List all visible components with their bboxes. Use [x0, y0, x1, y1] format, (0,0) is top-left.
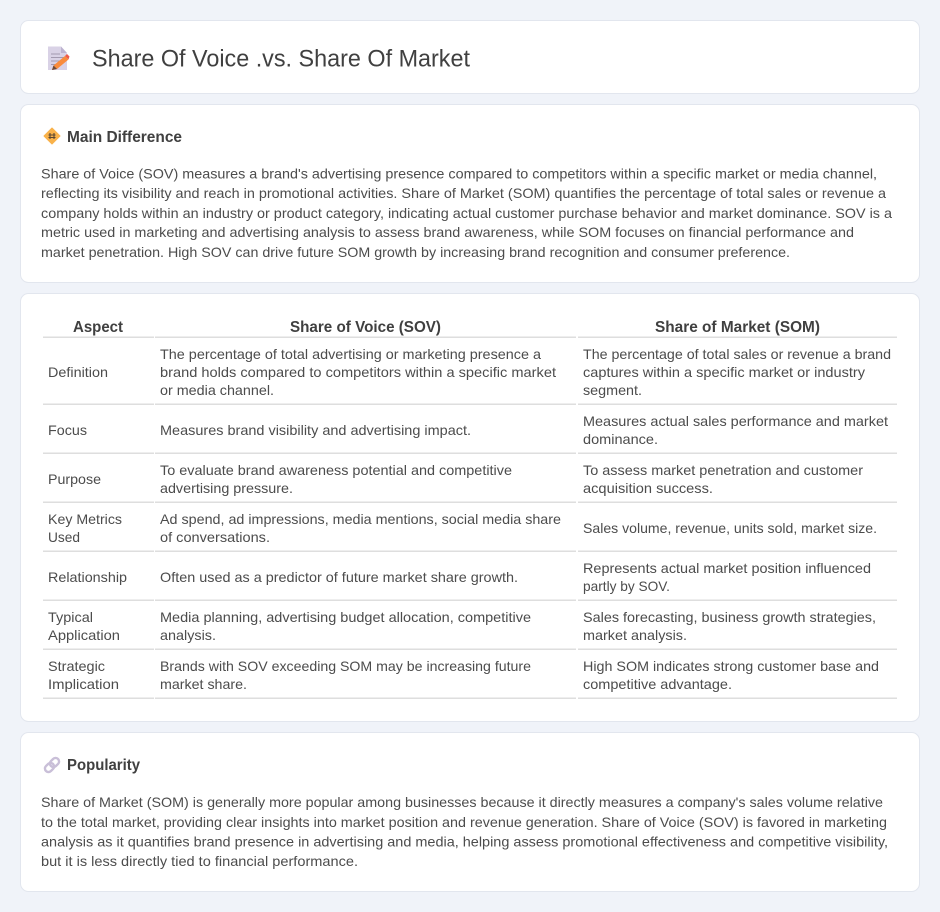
- row: typical application: analysis.: [160, 627, 216, 643]
- panel: popularity: [20, 732, 920, 892]
- row: typical application: [43, 609, 897, 650]
- row: key metrics used: [43, 511, 897, 552]
- row: typical application: Application: [48, 627, 120, 643]
- row: relationship: Often used as a predictor of future market share growth.: [160, 569, 518, 585]
- text block: popularity paragraph: analysis as it quantifies brand presence in advertising and media, helping assess promotional effectiveness and competitive visibility,: [41, 834, 888, 850]
- text block: popularity paragraph: to the total market, providing clear insights into market position and revenue generation. Share of Voice (SOV) is favored in marketing: [41, 814, 887, 830]
- heading: main difference: Main Difference: [67, 129, 182, 146]
- row: typical application: Media planning, advertising budget allocation, competitive: [160, 609, 531, 625]
- row: strategic implication: competitive advantage.: [583, 676, 732, 692]
- row: key metrics used: Used: [48, 529, 80, 545]
- row: definition: [43, 346, 897, 405]
- row: definition: segment.: [583, 382, 642, 398]
- row: strategic implication: Strategic: [48, 658, 105, 674]
- row: definition: or media channel.: [160, 382, 274, 398]
- row: key metrics used: Ad spend, ad impressions, media mentions, social media share: [160, 511, 561, 527]
- row: relationship: Represents actual market position influenced: [583, 560, 871, 576]
- row: relationship: partly by SOV.: [583, 578, 670, 594]
- row: key metrics used: Sales volume, revenue, units sold, market size.: [583, 520, 877, 536]
- panel: header: [20, 20, 920, 94]
- icon: chain link: [43, 756, 61, 774]
- row: key metrics used: of conversations.: [160, 529, 270, 545]
- text block: main difference paragraph: metric used in marketing and advertising analysis to assess brand awareness, while SOM focuses on financial performance and: [41, 224, 854, 240]
- row: strategic implication: High SOM indicates strong customer base and: [583, 658, 879, 674]
- icon: orange diamond sign: [44, 128, 60, 144]
- text block: main difference paragraph: reflecting its visibility and reach in promotional activities. Share of Market (SOM) quantifies the percentage of total sales or revenue a: [41, 185, 886, 201]
- row: typical application: market analysis.: [583, 627, 687, 643]
- row: relationship: [43, 560, 897, 601]
- row: strategic implication: Implication: [48, 676, 119, 692]
- text block: popularity paragraph: but it is less directly tied to financial performance.: [41, 853, 358, 869]
- icon: document with pencil: [48, 46, 70, 70]
- row: definition: brand holds compared to competitors within a specific market: [160, 364, 556, 380]
- row: focus: dominance.: [583, 431, 658, 447]
- title: Share Of Voice .vs. Share Of Market: [92, 46, 470, 72]
- row: definition: captures within a specific market or industry: [583, 364, 865, 380]
- table header row: Aspect: [73, 319, 124, 336]
- row: purpose: advertising pressure.: [160, 480, 293, 496]
- row: strategic implication: market share.: [160, 676, 247, 692]
- row: strategic implication: [43, 658, 897, 699]
- text block: popularity paragraph: Share of Market (SOM) is generally more popular among businesses because it directly measures a company's sales volume relative: [41, 794, 883, 810]
- row: focus: [43, 413, 897, 454]
- text block: main difference paragraph: company holds within an industry or product category, indicating actual customer purchase behavior and market dominance. SOV is a: [41, 205, 892, 221]
- row: purpose: [43, 462, 897, 503]
- row: purpose: To assess market penetration and customer: [583, 462, 863, 478]
- row: typical application: Typical: [48, 609, 93, 625]
- row: key metrics used: Key Metrics: [48, 511, 122, 527]
- panel: comparison table: [20, 294, 920, 722]
- text block: popularity paragraph: [41, 794, 888, 869]
- table header row: Share of Voice (SOV): [290, 319, 441, 336]
- row: definition: Definition: [48, 364, 108, 380]
- row: focus: Measures actual sales performance and market: [583, 413, 888, 429]
- row: definition: The percentage of total sales or revenue a brand: [583, 346, 891, 362]
- table header row: [43, 319, 897, 338]
- row: definition: The percentage of total advertising or marketing presence a: [160, 346, 541, 362]
- heading: popularity: Popularity: [67, 757, 140, 774]
- row: strategic implication: Brands with SOV exceeding SOM may be increasing future: [160, 658, 531, 674]
- panel: main difference: [20, 104, 920, 282]
- row: typical application: Sales forecasting, business growth strategies,: [583, 609, 876, 625]
- table header row: Share of Market (SOM): [655, 319, 820, 336]
- row: relationship: Relationship: [48, 569, 127, 585]
- row: purpose: acquisition success.: [583, 480, 713, 496]
- text block: main difference paragraph: [41, 166, 892, 260]
- text block: main difference paragraph: Share of Voice (SOV) measures a brand's advertising presence compared to competitors within a specific market or media channel,: [41, 166, 877, 182]
- text block: main difference paragraph: market penetration. High SOV can drive future SOM growth by increasing brand recognition and consumer preference.: [41, 244, 790, 260]
- row: purpose: To evaluate brand awareness potential and competitive: [160, 462, 512, 478]
- row: purpose: Purpose: [48, 471, 101, 487]
- row: focus: Focus: [48, 422, 87, 438]
- row: focus: Measures brand visibility and advertising impact.: [160, 422, 471, 438]
